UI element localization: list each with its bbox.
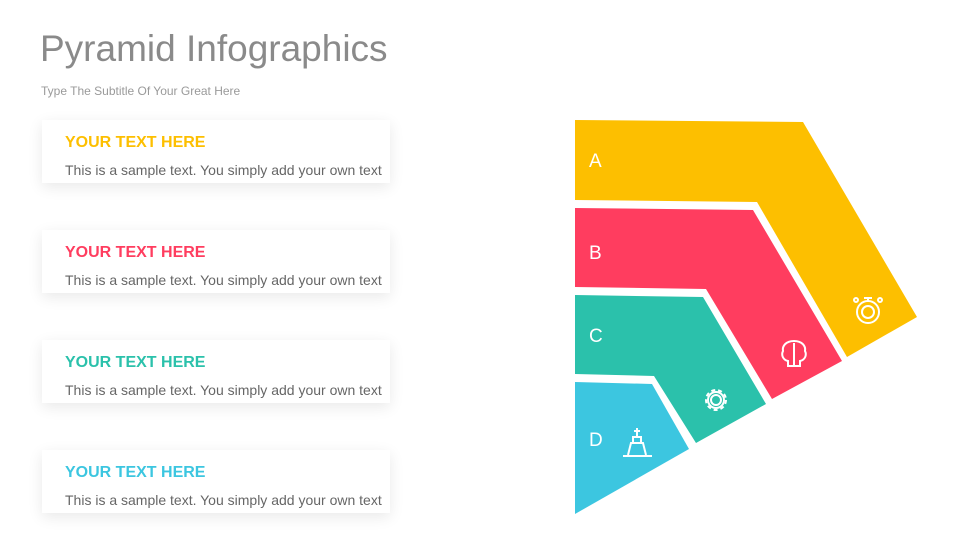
icon: chess king [623,428,652,456]
subtitle: Type The Subtitle Of Your Great Here [41,84,240,98]
card C: This is a sample text. You simply add your own text [65,382,382,398]
segment B: B [589,243,602,264]
icon: brain [782,341,806,366]
icon: gear [706,390,726,410]
card B: This is a sample text. You simply add your own text [65,272,382,288]
card C [42,340,390,403]
segment C [575,295,766,443]
icon: stopwatch [854,298,882,323]
title: Pyramid Infographics [40,28,388,69]
card D [42,450,390,513]
card A: YOUR TEXT HERE [65,134,205,151]
card C: YOUR TEXT HERE [65,354,205,371]
card D: This is a sample text. You simply add your own text [65,492,382,508]
segment C: C [589,326,603,347]
card A: This is a sample text. You simply add your own text [65,162,382,178]
card B: YOUR TEXT HERE [65,244,205,261]
card D: YOUR TEXT HERE [65,464,205,481]
card A [42,120,390,183]
card B [42,230,390,293]
segment A [575,120,917,357]
segment A: A [589,151,602,172]
segment D: D [589,430,603,451]
segment B [575,208,842,399]
segment D [575,382,689,514]
